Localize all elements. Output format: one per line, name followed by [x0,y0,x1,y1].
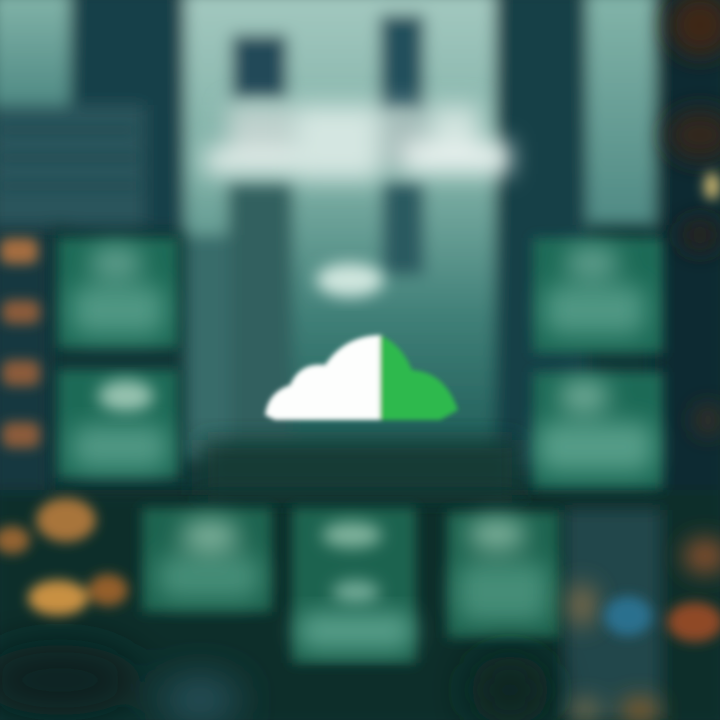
panel content: upper left [72,246,164,335]
upper white cloud [205,105,510,180]
panel content: bottom centre [322,522,382,604]
small cloud [316,263,384,297]
green half of cloud [380,335,458,420]
panel: lower right [533,372,663,488]
panel content: bottom left [158,520,260,599]
right side coloured lights [604,172,720,642]
panel content: lower left [98,380,154,412]
panel: bottom centre [292,508,416,663]
right side lights [568,0,720,720]
panel: upper right [533,238,663,353]
panel: lower left [58,370,178,478]
panel content: bottom right [458,519,548,622]
horizontal banding on left building [0,130,140,186]
bottom dark foreground [0,645,550,720]
panel content: upper right [545,246,645,335]
panel: upper left [58,238,178,348]
panel content: lower right [538,380,653,472]
panel body: lower left [72,425,167,469]
shadow band under cloud [200,440,520,495]
panel: bottom right [447,512,559,638]
white half of cloud [265,335,382,420]
panel body: bottom centre [298,612,413,650]
central cloud icon [265,335,458,420]
panel: bottom left [142,508,272,612]
orange window lights: left [0,238,128,616]
